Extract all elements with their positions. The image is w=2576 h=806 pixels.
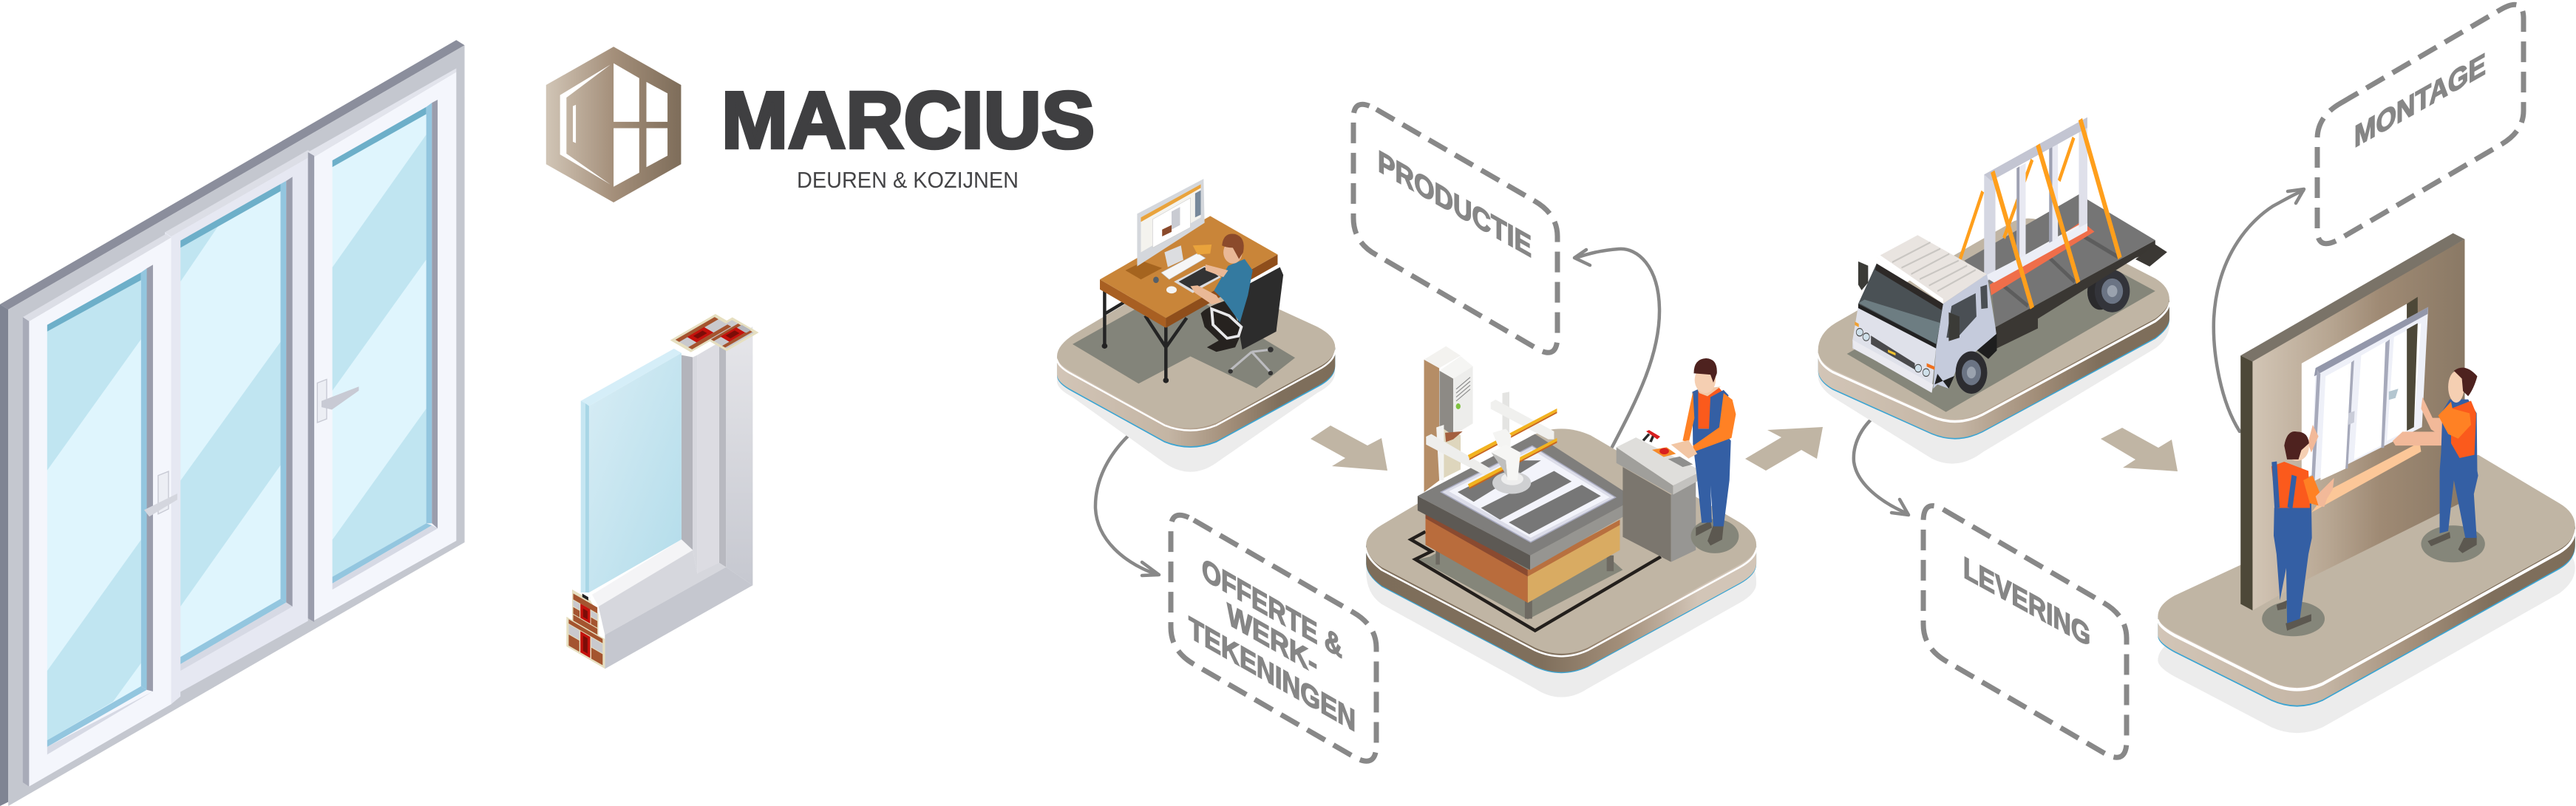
- desk: [1100, 216, 1277, 383]
- scene 4: montage platform: [2158, 233, 2575, 733]
- logo tagline: DEUREN & KOZIJNEN: [797, 167, 1019, 193]
- dashed label: montage: [2317, 4, 2524, 244]
- curved arrow to productie: [1574, 249, 1659, 447]
- dashed label: montage: MONTAGE: [2354, 47, 2486, 154]
- large isometric window: [0, 40, 465, 806]
- rack base beam: [1990, 221, 2118, 306]
- platform base: [1057, 274, 1335, 472]
- window frame on table: [1441, 446, 1616, 542]
- wall with opening: [2240, 233, 2464, 610]
- flow arrow 2: [1745, 427, 1823, 471]
- door handle right: [317, 380, 358, 423]
- dashed label: levering: [1923, 506, 2127, 757]
- dashed label: levering: LEVERING: [1963, 550, 2090, 654]
- worker at console: [1671, 358, 1739, 553]
- truck cab: [1852, 235, 1996, 394]
- bottom profile section: [566, 584, 605, 669]
- right door sash: [308, 69, 456, 622]
- floor marking: [1411, 507, 1661, 631]
- door handle left: [144, 471, 177, 516]
- window profile cross-section: [566, 311, 759, 669]
- curved arrow to levering: [1854, 410, 1909, 515]
- platform base: [1366, 428, 1756, 697]
- top profile section: [670, 311, 759, 362]
- dashed label: offerte en werktekeningen: [1171, 515, 1376, 761]
- seated person and chair: [1190, 233, 1283, 375]
- dashed label: offerte en werktekeningen: TEKENINGEN: [1189, 610, 1356, 739]
- machine post and control cabinet: [1424, 346, 1473, 492]
- flow arrow 3: [2101, 428, 2178, 471]
- scene 1: offerte desk platform: [1057, 179, 1335, 472]
- scene 3: levering truck platform: [1818, 117, 2169, 464]
- worker left: [2262, 425, 2334, 636]
- dashed label: productie: [1353, 104, 1557, 352]
- window being installed: [2311, 307, 2428, 513]
- platform base: [2158, 455, 2575, 733]
- curved arrow to offerte: [1095, 428, 1159, 576]
- middle fixed panel: [165, 150, 314, 697]
- platform base: [1818, 219, 2169, 464]
- computer monitor and peripherals: [1137, 179, 1221, 293]
- logo hexagon mark: [546, 47, 681, 202]
- left door sash: [23, 233, 180, 787]
- flatbed: [1964, 194, 2155, 327]
- curved arrow to montage: [2214, 189, 2304, 431]
- truck rear wheels and chassis: [1996, 240, 2167, 349]
- gantry arm and orange beams: [1426, 392, 1557, 494]
- control console: [1617, 430, 1702, 562]
- worker right: [2393, 368, 2485, 562]
- machine table top: [1418, 434, 1635, 570]
- window on rack with straps: [1960, 117, 2120, 308]
- machine legs and body: [1426, 510, 1620, 618]
- scene 2: productie platform: [1366, 346, 1756, 697]
- dashed label: offerte en werktekeningen: OFFERTE &: [1202, 552, 1342, 666]
- logo wordmark: MARCIUS: [721, 75, 1095, 165]
- dashed label: offerte en werktekeningen: WERK-: [1227, 597, 1317, 682]
- flow arrow 1: [1311, 426, 1387, 471]
- dashed label: productie: PRODUCTIE: [1378, 144, 1532, 264]
